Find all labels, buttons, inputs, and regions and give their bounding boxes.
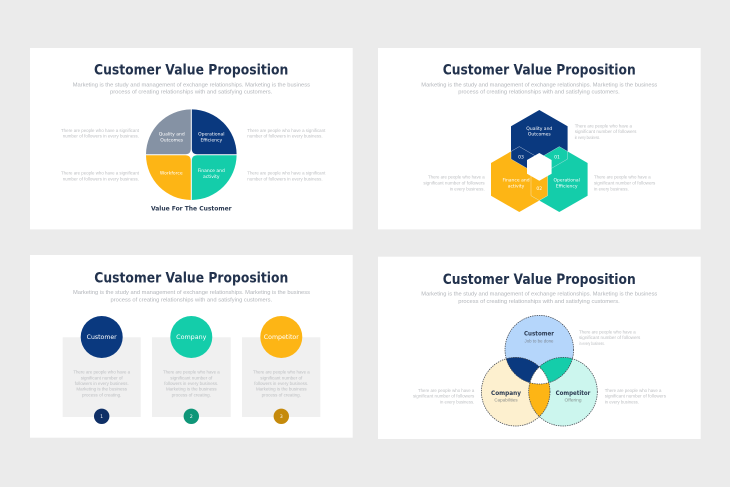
hexagon labels: 03 (518, 155, 524, 161)
card: company: significant number of (170, 375, 213, 380)
panel: venn diagram slide (378, 257, 701, 439)
card: customer (63, 316, 141, 424)
side text: left: There are people who have a (428, 175, 485, 180)
overlap 03 (511, 147, 548, 175)
card: customer: Customer (87, 334, 117, 341)
venn diagram (481, 315, 597, 426)
side text: bottom left (61, 170, 140, 181)
subtitle: Marketing is the study and management of exchange relationships. Marketing is the business (421, 291, 657, 297)
side text: right: There are people who have a (594, 175, 651, 180)
side text: left: in every business. (450, 186, 485, 191)
side text: top left: There are people who have a significant (61, 128, 140, 133)
overlap: customer and company (506, 357, 539, 383)
venn label: customer (524, 331, 555, 343)
venn label: company (491, 390, 521, 403)
side text: left: significant number of followers (423, 180, 485, 185)
hexagon labels: 01 (554, 154, 560, 160)
side text: left: There are people who have a (418, 388, 475, 393)
card: customer: process of creating. (82, 392, 121, 397)
card: competitor: 3 (280, 414, 283, 420)
side text: top right: There are people who have a significant (247, 128, 326, 133)
card: company: 2 (190, 414, 193, 420)
venn label: competitor: Competitor (556, 390, 591, 397)
side text: right (605, 388, 667, 405)
pie labels: Outcomes (160, 138, 184, 144)
side text: left (413, 388, 475, 405)
pie slice: finance and activity (192, 155, 237, 200)
hexagon labels: Efficiency (556, 183, 578, 189)
side text: right: in every business. (605, 400, 639, 405)
side text: top right: in every business. (579, 341, 605, 346)
side text: right: significant number of followers (594, 180, 656, 185)
card: customer: There are people who have a (73, 370, 130, 375)
hexagon labels (502, 126, 580, 192)
side text: top right: significant number of followers (575, 129, 637, 134)
side text: top right (579, 329, 641, 346)
overlap: company and competitor (528, 367, 550, 416)
side text: right: in every business. (594, 186, 629, 191)
subtitle (421, 82, 657, 96)
side text: left (423, 175, 485, 191)
centre hexagon (527, 153, 552, 181)
pie labels: Efficiency (200, 138, 222, 144)
hexagon labels: Finance and (502, 177, 530, 183)
card: company: There are people who have a (163, 370, 220, 375)
hexagon labels: Quality and (526, 126, 552, 132)
side text: top right: There are people who have a (579, 329, 636, 334)
subtitle: process of creating relationships with and satisfying customers. (110, 90, 273, 96)
pie labels: Quality and (159, 132, 185, 138)
overlap: customer and competitor (530, 357, 572, 382)
pie slice: operational efficiency (192, 109, 237, 154)
side text: right (594, 175, 656, 191)
overlap 02 (531, 158, 548, 200)
card: customer: 1 (100, 414, 103, 420)
card: customer: followers in every business. (75, 381, 129, 386)
side text: left: in every business. (440, 400, 474, 405)
subtitle (73, 82, 310, 96)
side text: top right (575, 123, 637, 140)
hexagon: operational efficiency (531, 147, 588, 212)
title: Customer Value Proposition (443, 272, 636, 288)
card: competitor (242, 316, 320, 424)
pie slice: quality and outcomes (146, 109, 191, 154)
subtitle: Marketing is the study and management of exchange relationships. Marketing is the business (421, 82, 657, 88)
subtitle (73, 290, 310, 303)
circle: competitor (529, 357, 597, 426)
pie slice: workforce (146, 155, 191, 200)
hexagon labels: Outcomes (528, 132, 551, 138)
hexagon: quality and outcomes (511, 110, 568, 175)
card: company: Marketing is the business (166, 387, 217, 392)
side text: top left (61, 128, 140, 139)
subtitle: process of creating relationships with and satisfying customers. (458, 90, 620, 96)
side text: top right: number of followers in every business. (247, 134, 323, 139)
pie caption: Value For The Customer (151, 206, 233, 213)
card: competitor: There are people who have a (253, 370, 310, 375)
side text: top right: in every business. (575, 135, 600, 140)
card: competitor: significant number of (260, 375, 303, 380)
subtitle: Marketing is the study and management of exchange relationships. Marketing is the business (73, 82, 310, 88)
pie labels: Operational (198, 132, 225, 138)
subtitle (421, 291, 657, 305)
venn label: competitor (556, 390, 591, 403)
title: Customer Value Proposition (94, 271, 288, 287)
card: company: Company (176, 334, 207, 341)
side text: bottom left: There are people who have a significant (61, 170, 140, 175)
side text: bottom right (247, 170, 326, 181)
overlap: centre (530, 367, 548, 384)
card: company (152, 316, 231, 424)
hexagon labels: Operational (553, 177, 580, 183)
hexagon labels: activity (508, 183, 525, 189)
pie labels: activity (203, 174, 220, 180)
subtitle: Marketing is the study and management of exchange relationships. Marketing is the business (73, 290, 310, 296)
side text: bottom right: number of followers in every business. (247, 176, 323, 181)
subtitle: process of creating relationships with and satisfying customers. (110, 297, 273, 303)
side text: bottom right: There are people who have a significant (247, 170, 326, 175)
circle: company (481, 357, 550, 426)
venn label: competitor: Offering (564, 398, 582, 403)
title: Customer Value Proposition (94, 63, 288, 79)
venn label: customer: Customer (524, 331, 555, 338)
card: competitor: Competitor (264, 334, 299, 341)
side text: right: significant number of followers (605, 394, 667, 399)
title: Customer Value Proposition (443, 63, 636, 79)
card: customer: significant number of (81, 375, 123, 380)
dashed outlines (481, 315, 597, 426)
side text: right: There are people who have a (605, 388, 662, 393)
panel: three cards slide (30, 255, 353, 438)
card: competitor: process of creating. (262, 392, 301, 397)
panel: pie chart slide (30, 48, 353, 229)
pie chart (146, 109, 237, 200)
card: company: process of creating. (172, 392, 211, 397)
side text: top right (247, 128, 326, 139)
pie labels: Finance and (198, 168, 225, 174)
circle: customer (505, 315, 574, 384)
side text: top right: There are people who have a (575, 123, 632, 128)
card: competitor: followers in every business. (254, 381, 308, 386)
side text: bottom left: number of followers in every business. (63, 176, 139, 181)
venn label: customer: Job to be done (524, 338, 554, 343)
card: company: followers in every business. (164, 381, 218, 386)
pie labels: Workforce (160, 170, 183, 176)
side text: top left: number of followers in every business. (63, 134, 139, 139)
hexagon: finance and activity (491, 147, 548, 212)
hexagon labels: 02 (536, 186, 542, 192)
overlap 01 (531, 147, 568, 175)
card: competitor: Marketing is the business (256, 387, 307, 392)
side text: top right: significant number of followers (579, 335, 641, 340)
venn label: company: Company (491, 390, 521, 397)
pie labels (159, 132, 225, 180)
venn label: company: Capabilities (494, 398, 518, 403)
side text: left: significant number of followers (413, 394, 475, 399)
panel: hexagon slide (378, 48, 701, 229)
subtitle: process of creating relationships with and satisfying customers. (458, 299, 620, 305)
card: customer: Marketing is the business (76, 387, 128, 392)
hexagon diagram (491, 110, 588, 212)
